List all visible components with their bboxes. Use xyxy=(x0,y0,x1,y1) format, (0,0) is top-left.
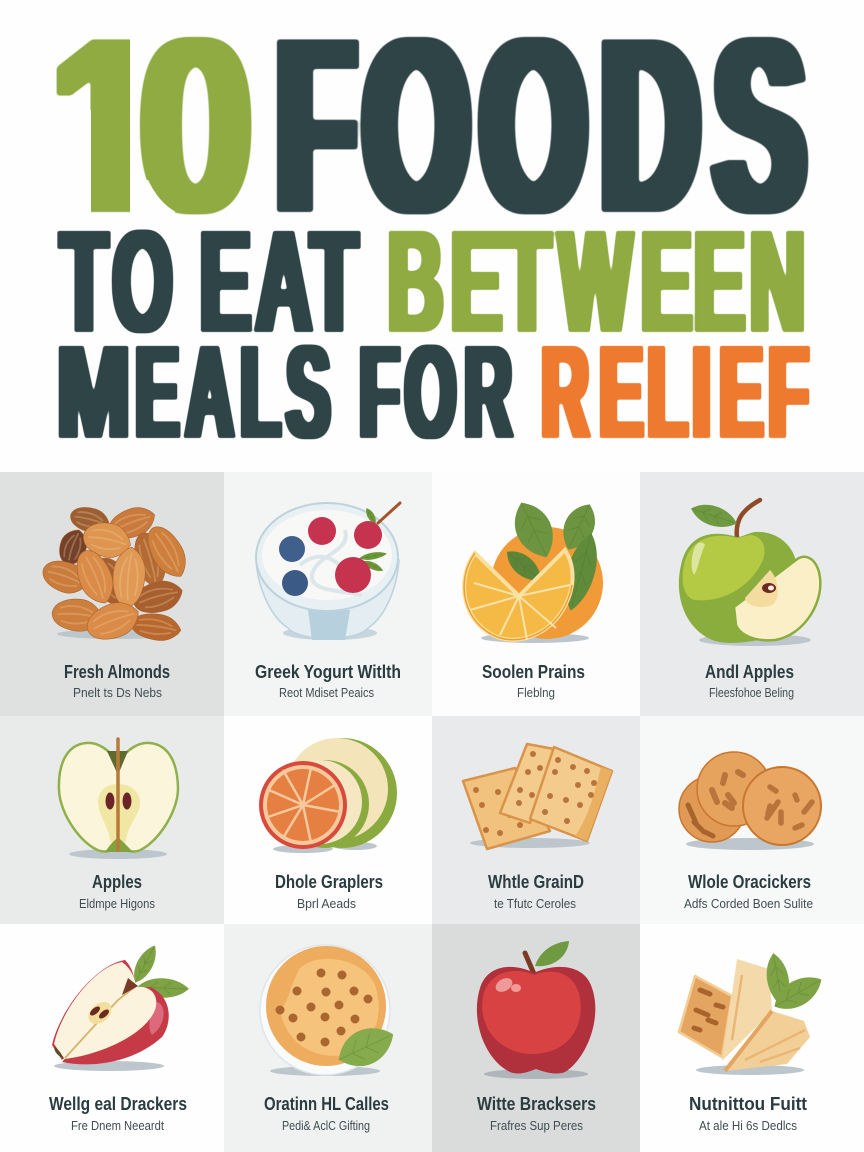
description: Fleesfohoe Beling xyxy=(709,685,794,700)
name: Andl Apples xyxy=(705,662,794,682)
name: Greek Yogurt Witlth xyxy=(255,662,401,682)
icon: grapefruit slices xyxy=(259,738,397,853)
icon: almonds xyxy=(38,502,194,646)
panel: witte bracksers xyxy=(432,924,640,1152)
name: Dhole Graplers xyxy=(275,872,383,892)
name: Oratinn HL Calles xyxy=(264,1094,389,1114)
name: Soolen Prains xyxy=(482,662,585,682)
panel: fresh almonds xyxy=(0,472,224,716)
description: Eldmpe Higons xyxy=(79,896,155,911)
icon: crackers and leaf xyxy=(679,952,828,1075)
panel: andl apples xyxy=(640,472,864,716)
icon: oat cookie with leaf xyxy=(260,945,401,1076)
description: te Tfutc Ceroles xyxy=(494,896,576,911)
description: Reot Mdiset Peaics xyxy=(279,685,374,700)
name: Apples xyxy=(92,872,142,892)
icon: square crackers xyxy=(463,744,612,849)
panel: nutnittou fuitt xyxy=(640,924,864,1152)
description: At ale Hi 6s Dedlcs xyxy=(699,1118,797,1133)
panel: wlole oracickers xyxy=(640,716,864,924)
icon: apple halved xyxy=(59,739,178,859)
description: Bprl Aeads xyxy=(297,896,356,911)
panel: soolen prains xyxy=(432,472,640,716)
heading line 2: TO EAT BETWEEN: BETWEEN xyxy=(388,203,805,362)
description: Fleblng xyxy=(517,685,555,700)
panel: oratinn hl calles xyxy=(224,924,432,1152)
icon: yogurt bowl xyxy=(256,503,400,640)
name: Wellg eal Drackers xyxy=(49,1094,187,1114)
icon: orange and leaves xyxy=(464,495,605,643)
heading line 3: MEALS FOR RELIEF xyxy=(57,318,808,465)
heading line 3: MEALS FOR RELIEF: EALS FOR xyxy=(135,318,512,465)
icon: red apple xyxy=(477,941,595,1079)
panel: dhole graplers xyxy=(224,716,432,924)
description: Pedi& AclC Gifting xyxy=(282,1118,370,1133)
panel: greek yogurt xyxy=(224,472,432,716)
heading line 2: TO EAT BETWEEN xyxy=(61,203,805,362)
name: Whtle GrainD xyxy=(488,872,584,892)
description: Frafres Sup Peres xyxy=(490,1118,583,1133)
name: Fresh Almonds xyxy=(64,662,170,682)
name: Nutnittou Fuitt xyxy=(689,1094,807,1114)
heading line 2: TO EAT BETWEEN: TO EAT xyxy=(61,203,357,362)
panel: apples xyxy=(0,716,224,924)
icon: green apple with slice xyxy=(679,499,820,646)
panel: whtle graind xyxy=(432,716,640,924)
description: Pnelt ts Ds Nebs xyxy=(73,685,162,700)
description: Adfs Corded Boen Sulite xyxy=(684,896,813,911)
panel: wellg eal drackers xyxy=(0,924,224,1152)
name: Witte Bracksers xyxy=(477,1094,596,1114)
name: Wlole Oracickers xyxy=(688,872,811,892)
title xyxy=(56,36,810,440)
icon: round cookies xyxy=(679,752,821,850)
icon: red apple wedge xyxy=(52,942,189,1071)
heading line 3: MEALS FOR RELIEF: M xyxy=(57,318,130,465)
description: Fre Dnem Neeardt xyxy=(71,1118,164,1133)
heading line 3: MEALS FOR RELIEF: RELIEF xyxy=(541,318,808,465)
